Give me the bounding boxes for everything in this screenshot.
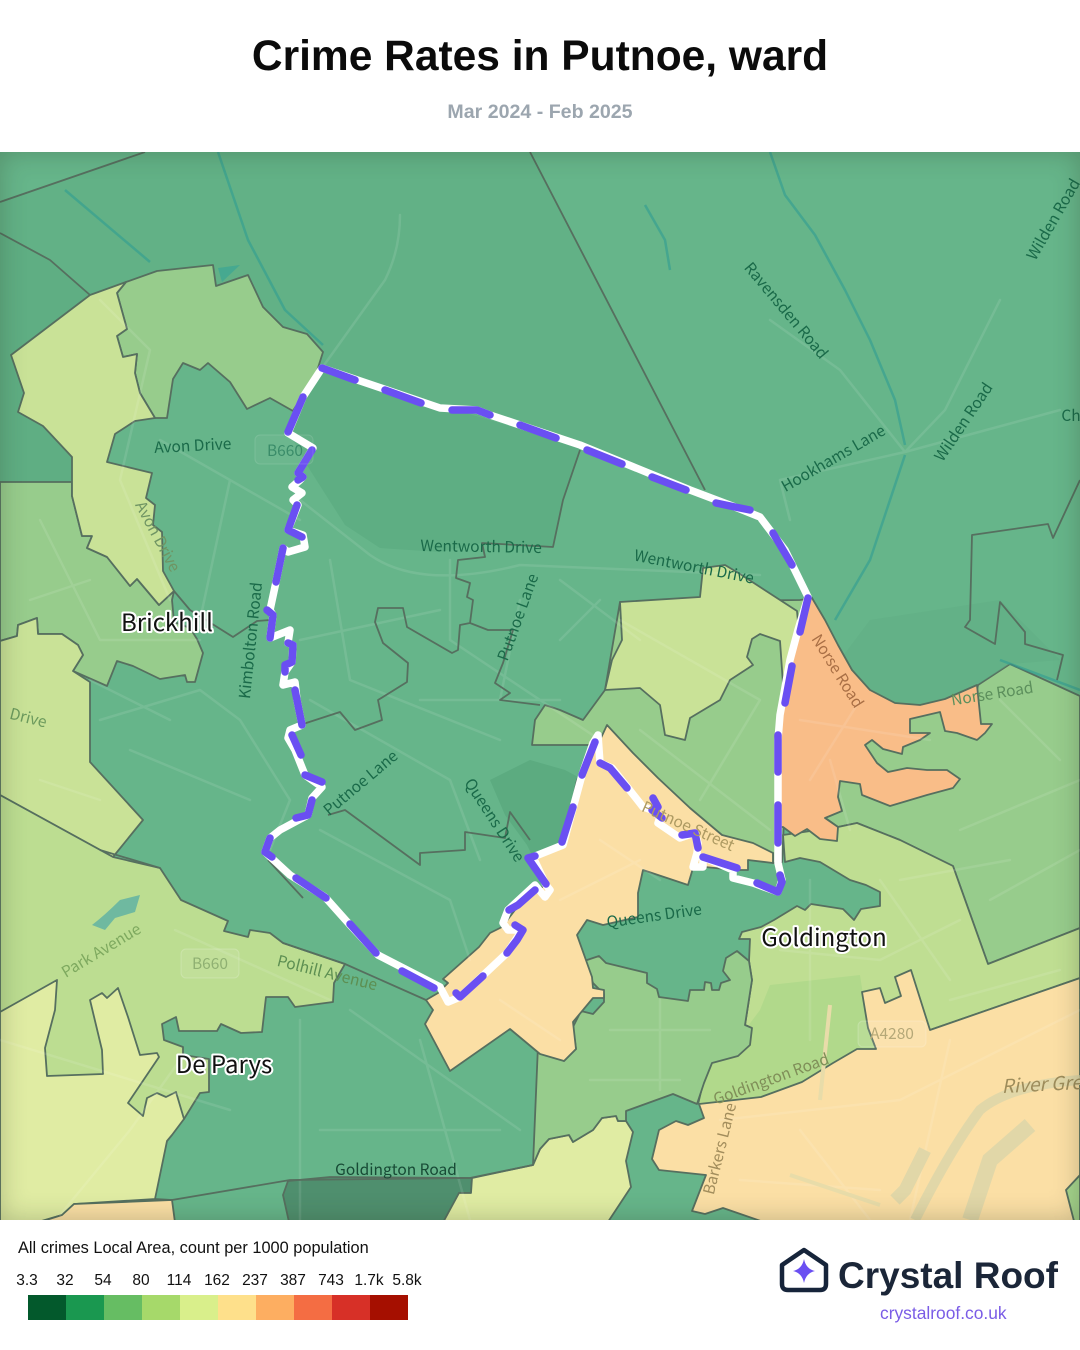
legend: colour scale: 237 <box>242 1272 268 1289</box>
subtitle: date range: Mar 2024 - Feb 2025 <box>447 101 633 123</box>
road shield: B660 north <box>255 435 313 464</box>
road and place labels: River Gre <box>1001 1068 1080 1099</box>
ward boundary: Putnoe <box>265 368 808 1002</box>
road and place labels: Barkers Lane <box>697 1100 741 1197</box>
road and place labels: Norse Road <box>949 676 1035 710</box>
road and place labels: Putnoe Lane <box>491 570 543 664</box>
legend: colour scale: 387 <box>280 1272 306 1289</box>
road and place labels: Polhill Avenue <box>275 949 380 995</box>
road and place labels: Avon Drive <box>130 497 186 575</box>
legend: colour scale: 54 <box>94 1272 112 1289</box>
map areas: crime rate choropleth polygons <box>0 152 1080 1232</box>
road and place labels: Park Avenue <box>57 917 145 982</box>
road and place labels: Kimbolton Road <box>233 581 267 700</box>
road and place labels: Putnoe Street <box>639 795 738 856</box>
road and place labels: Wentworth Drive <box>420 534 542 558</box>
road and place labels: Drive <box>8 702 49 732</box>
place labels: Brickhill <box>121 603 213 638</box>
legend: colour scale: 32 <box>56 1272 74 1289</box>
road and place labels: Putnoe Lane <box>318 745 402 820</box>
legend: colour scale: 80 <box>132 1272 150 1289</box>
place labels: De Parys <box>176 1045 272 1080</box>
road shield: A4280: A4280 <box>870 1022 914 1044</box>
road and place labels: Wentworth Drive <box>632 544 756 589</box>
legend: colour scale <box>16 1272 422 1320</box>
legend: colour scale: 743 <box>318 1272 344 1289</box>
road and place labels <box>8 174 1080 1197</box>
roads: faint street network <box>0 215 1080 1220</box>
area boundaries: thin outlines <box>0 152 1080 1200</box>
legend: colour scale: 162 <box>204 1272 230 1289</box>
road and place labels: Queens Drive <box>605 897 703 933</box>
legend title: All crimes Local Area, count per 1000 population <box>18 1239 369 1257</box>
legend: colour scale: 114 <box>167 1272 191 1289</box>
water: brooks and river <box>65 152 1080 1220</box>
title: Crime Rates in Putnoe, ward <box>252 33 828 80</box>
road and place labels: Ravensden Road <box>740 257 834 363</box>
road shield: B660 south <box>181 949 239 978</box>
road and place labels: Goldington Road <box>710 1047 832 1110</box>
legend: colour scale: 3.3 <box>16 1272 38 1289</box>
road and place labels: Queens Drive <box>460 774 530 866</box>
choropleth map <box>0 152 1080 1220</box>
place labels <box>121 603 887 1080</box>
legend: colour scale: 1.7k <box>354 1272 384 1289</box>
road and place labels: Hookhams Lane <box>777 419 889 497</box>
ward boundary dashes <box>265 368 808 997</box>
logo wordmark: Crystal Roof <box>838 1255 1058 1296</box>
place labels: Goldington <box>761 918 887 953</box>
website url: crystalroof.co.uk <box>880 1303 1007 1323</box>
road and place labels: Wilden Road <box>929 378 997 465</box>
road and place labels: Norse Road <box>807 630 869 712</box>
road shield: A4280 <box>858 1021 926 1047</box>
road shield: B660 north: B660 <box>267 439 303 461</box>
road and place labels: Goldington Road <box>335 1158 457 1180</box>
legend: colour scale: 5.8k <box>392 1272 422 1289</box>
road shield: B660 south: B660 <box>192 952 228 974</box>
logo icon: house with star <box>780 1248 828 1292</box>
road and place labels: Avon Drive <box>154 432 232 458</box>
